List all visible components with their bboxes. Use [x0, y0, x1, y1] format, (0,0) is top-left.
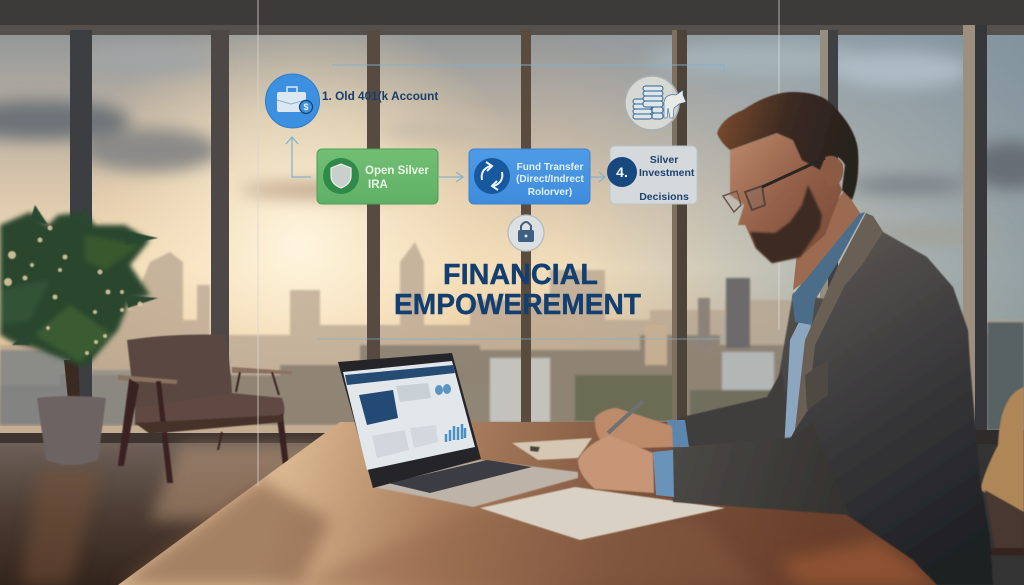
step 1: old 401k account: 1. Old 401(k Account [322, 89, 438, 103]
back sleeve [678, 370, 790, 447]
plant foliage [0, 212, 150, 368]
laptop header bar [345, 365, 455, 385]
chair frame and legs [118, 367, 292, 384]
step 4: silver investment decisions: Investment [639, 167, 695, 179]
arrow: green box up to step 1 [286, 137, 311, 177]
step 4: silver investment decisions: Decisions [639, 191, 689, 203]
icon: briefcase with dollar [266, 74, 320, 128]
step 2: open silver IRA [317, 149, 438, 204]
paper sheet [480, 487, 725, 540]
front hand [578, 435, 654, 493]
glass overlay: frame lines [258, 0, 724, 486]
window frame: top beam, mullions, sill [0, 0, 1024, 444]
glasses [723, 158, 825, 212]
step 3: fund transfer: Rolorver) [528, 187, 572, 198]
floor [0, 443, 345, 585]
laptop [338, 353, 578, 507]
step 3: fund transfer [469, 149, 590, 204]
laptop base [373, 460, 578, 507]
ear [822, 156, 843, 187]
step 3: fund transfer: (Direct/Indrect [516, 174, 585, 185]
step 4: silver investment decisions: Silver [650, 154, 678, 166]
background: blurred city skyline [0, 242, 1024, 430]
step 2: open silver IRA: IRA [368, 179, 388, 191]
neck [793, 190, 860, 290]
arrow: blue to step 4 [591, 172, 605, 182]
plant leaf highlights [4, 218, 142, 355]
shirt collar [792, 212, 865, 325]
arrow: green to blue [439, 172, 463, 182]
clipboard [512, 438, 592, 460]
icon: silver coins and bull [625, 76, 686, 130]
shirt cuffs [667, 420, 689, 447]
face [730, 133, 842, 263]
beard [750, 185, 822, 263]
hair [717, 92, 858, 200]
potted plant [0, 205, 158, 465]
step 1: old 401k account [266, 74, 438, 128]
documents on desk [480, 438, 725, 540]
plant leaf tips [12, 205, 158, 345]
laptop screen bezel [338, 353, 481, 488]
step 2: open silver IRA: Open Silver [365, 165, 429, 177]
workflow diagram [266, 74, 697, 321]
laptop display [343, 361, 475, 470]
back hand [595, 408, 673, 448]
jacket body [773, 217, 993, 585]
vertical glass overlay line, behind the man [778, 0, 780, 330]
title [394, 259, 641, 321]
office chair behind the man [918, 387, 1024, 575]
front sleeve [673, 423, 850, 515]
lapel [795, 213, 883, 430]
desk [118, 422, 940, 585]
icon: briefcase with dollar: $ [303, 102, 309, 112]
icon: padlock [508, 215, 544, 251]
icon: transfer arrows [474, 158, 510, 194]
step 4: silver investment decisions [607, 146, 697, 204]
title: EMPOWEREMENT [394, 289, 641, 321]
chair back [127, 335, 232, 408]
laptop chart panel [359, 390, 398, 425]
icon: shield [323, 158, 359, 194]
title: FINANCIAL [443, 259, 598, 291]
man working at the desk [578, 92, 993, 585]
jacket pocket [805, 360, 828, 410]
pen [608, 401, 643, 433]
lounge chair [118, 335, 292, 482]
plant pot [37, 396, 106, 465]
shirt placket [784, 290, 815, 450]
chair seat [135, 393, 284, 425]
step 4: silver investment decisions: 4. [616, 164, 628, 180]
background: sunset sky through windows [0, 25, 1024, 430]
plant trunk [64, 360, 80, 400]
step 3: fund transfer: Fund Transfer [517, 162, 583, 173]
